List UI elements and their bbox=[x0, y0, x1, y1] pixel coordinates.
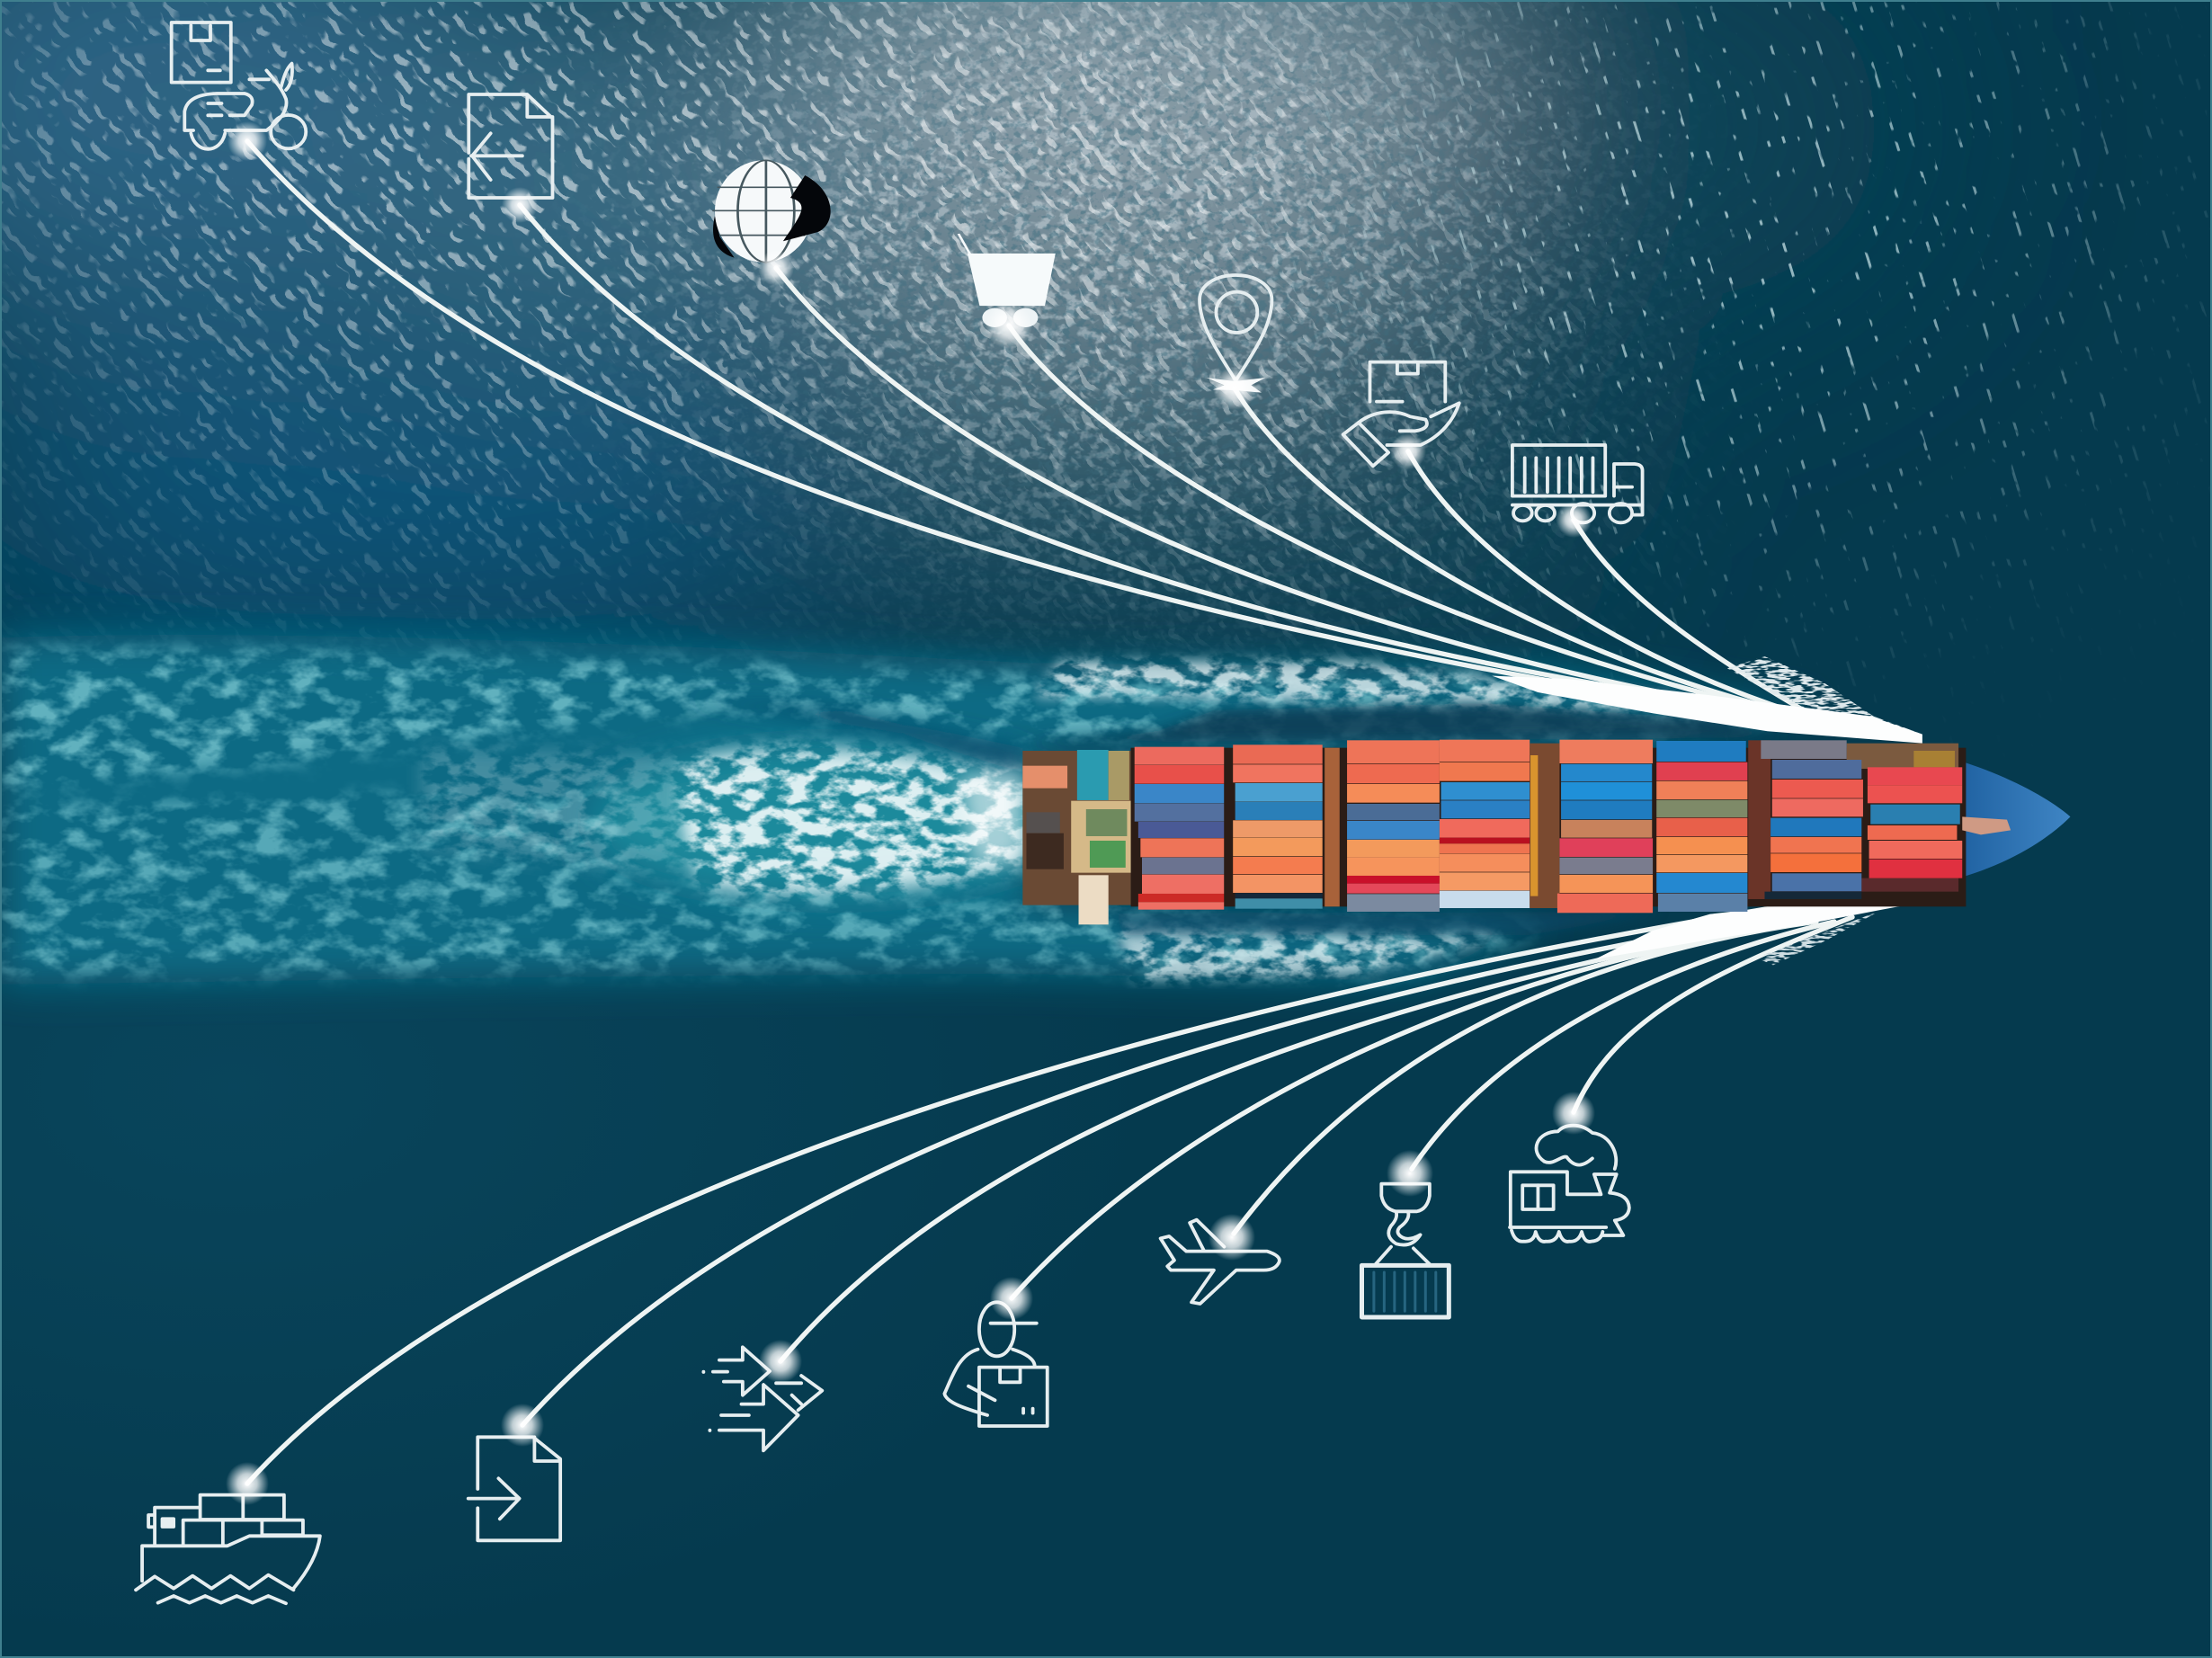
dark lashing bridge bbox=[1748, 740, 1770, 899]
icon: document with return arrow bbox=[468, 94, 552, 198]
icon: shopping cart bbox=[959, 234, 1054, 327]
icon: delivery person bbox=[944, 1302, 1048, 1426]
bow foam top bbox=[1492, 656, 1922, 744]
icon: document with enter arrow bbox=[468, 1437, 560, 1540]
light glows at route endpoints bbox=[226, 121, 1595, 1505]
container column 1 bbox=[1135, 747, 1224, 910]
top route lines bbox=[247, 141, 1834, 728]
water ripples bbox=[2, 2, 2208, 689]
bow bbox=[1951, 758, 2070, 878]
container column 6 bbox=[1656, 741, 1747, 912]
bow foam bottom bbox=[1595, 890, 1922, 965]
icon: steam locomotive bbox=[1510, 1126, 1629, 1242]
container ship bbox=[1022, 740, 2070, 924]
icon: airplane bbox=[1161, 1220, 1280, 1304]
icon: scooter with parcel bbox=[172, 22, 306, 149]
icon: globe bbox=[712, 160, 831, 263]
container column 2 bbox=[1233, 744, 1323, 909]
container column 7 bbox=[1761, 740, 1863, 899]
icon: container truck bbox=[1512, 445, 1643, 522]
icon: fast arrows bbox=[703, 1347, 822, 1450]
icon: location pin bbox=[1200, 275, 1271, 393]
container column 4 bbox=[1440, 740, 1530, 908]
stern superstructure bbox=[1022, 750, 1131, 924]
icon: hand holding parcel bbox=[1343, 362, 1459, 466]
lashing bridge with yellow rail bbox=[1530, 744, 1559, 908]
bottom route lines bbox=[247, 904, 1852, 1484]
icon: cargo ship bbox=[136, 1495, 320, 1603]
lashing bridge bbox=[1325, 748, 1340, 906]
ship wake bbox=[2, 620, 1789, 1002]
container column 8 bbox=[1868, 767, 1962, 878]
container column 5 bbox=[1557, 740, 1653, 913]
container column 3 bbox=[1347, 740, 1440, 912]
hull deck bbox=[1131, 748, 1966, 906]
icon: crane hook with container bbox=[1361, 1184, 1449, 1317]
ocean background bbox=[2, 2, 2208, 1318]
